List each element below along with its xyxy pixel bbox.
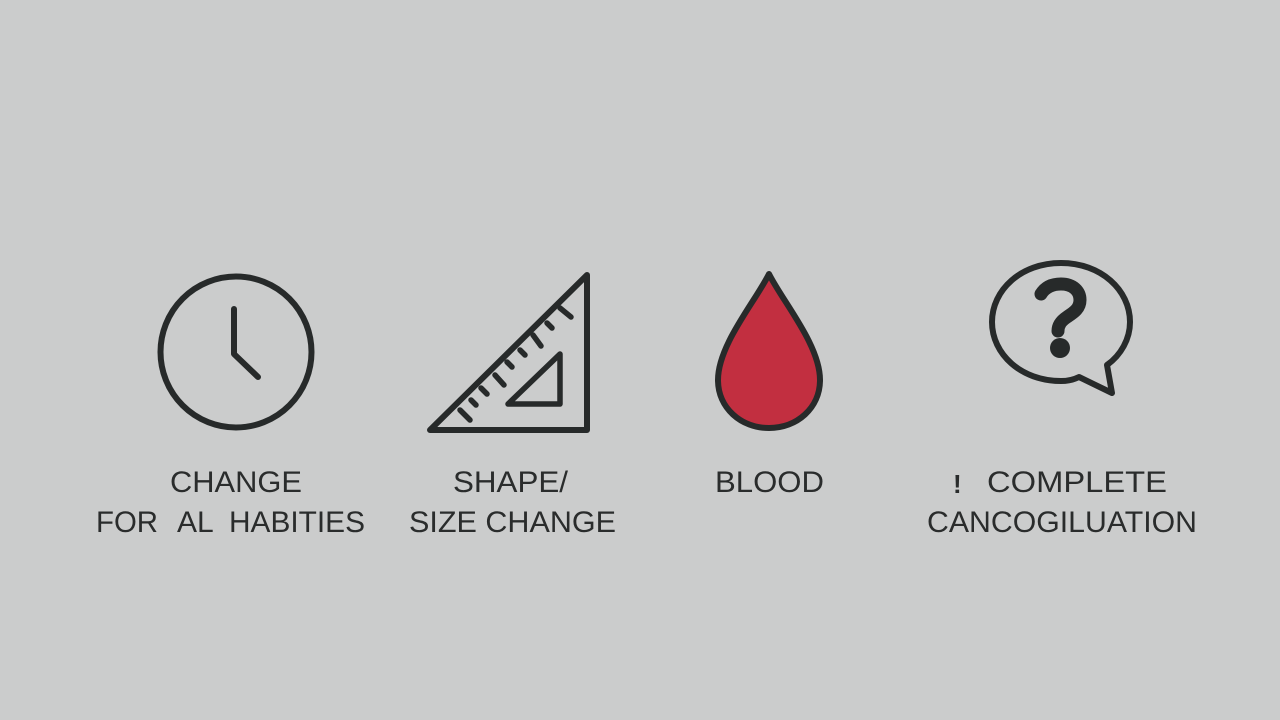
label: change for all habities: FOR xyxy=(96,506,158,539)
label: shape/size change: SIZE CHANGE xyxy=(409,506,616,539)
label: blood: BLOOD xyxy=(715,466,824,499)
label: complete cancogiluation xyxy=(927,466,1197,539)
icon: clock xyxy=(160,276,312,428)
icon: question speech bubble xyxy=(992,263,1130,393)
icon: set square ruler xyxy=(430,275,587,430)
label: complete cancogiluation: ! xyxy=(953,469,962,499)
label: change for all habities: HABITIES xyxy=(229,506,365,539)
icon: blood drop xyxy=(718,274,820,428)
label: shape/size change: SHAPE/ xyxy=(453,466,569,499)
label: change for all habities xyxy=(96,466,365,539)
label: complete cancogiluation: CANCOGILUATION xyxy=(927,506,1197,539)
label: change for all habities: AL xyxy=(177,506,214,539)
label: complete cancogiluation: COMPLETE xyxy=(987,466,1167,499)
label: shape/size change xyxy=(409,466,616,539)
label: change for all habities: CHANGE xyxy=(170,466,302,499)
